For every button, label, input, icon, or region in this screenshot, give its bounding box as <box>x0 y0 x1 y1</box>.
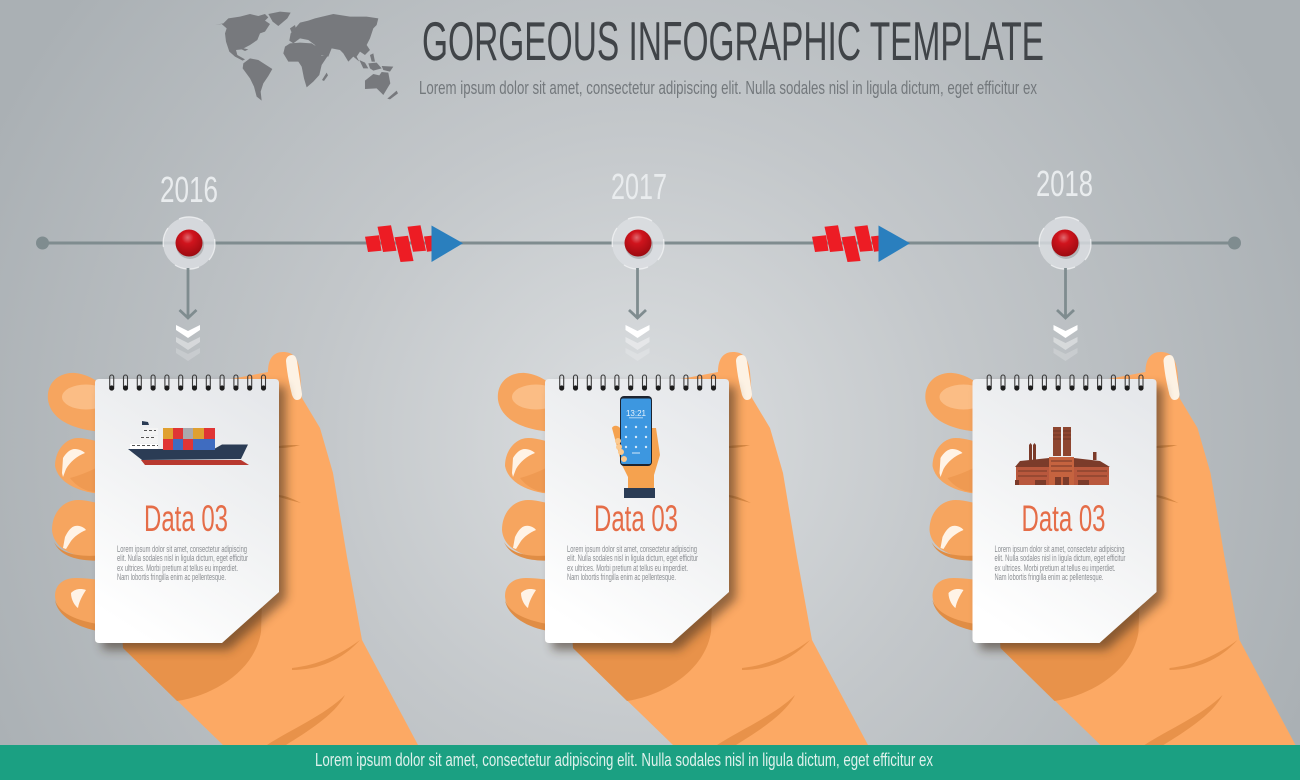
hand <box>925 352 1296 745</box>
card body text: ex ultrices. Morbi pretium at tellus eu imperdiet. <box>117 563 238 573</box>
notepad shadow <box>102 386 286 650</box>
notepad <box>95 379 279 643</box>
timeline axis <box>36 236 1241 250</box>
spiral binding <box>987 375 1144 391</box>
card body text: Nam lobortis fringilla enim ac pellentesque. <box>117 572 226 582</box>
down arrow 2018 <box>1054 268 1078 361</box>
arrow between 2016 and 2017 <box>365 225 463 262</box>
card body text: elit. Nulla sodales nisl in ligula dictum, eget efficitur <box>994 553 1126 563</box>
timeline marker 2018 <box>1039 217 1091 269</box>
card body text: Lorem ipsum dolor sit amet, consectetur adipiscing <box>994 544 1124 554</box>
arrow between 2017 and 2018 <box>812 225 910 262</box>
panel: 2016 hand with notepad <box>48 352 418 745</box>
card body text: Lorem ipsum dolor sit amet, consectetur adipiscing <box>117 544 247 554</box>
notepad <box>972 379 1156 643</box>
card body text: Nam lobortis fringilla enim ac pellentesque. <box>567 572 676 582</box>
card heading: Data 03 <box>144 498 228 539</box>
down arrow 2017 <box>626 268 650 361</box>
card heading: Data 03 <box>594 498 678 539</box>
icon: factory <box>1015 427 1110 485</box>
panel: 2018 hand with notepad <box>925 352 1296 745</box>
icon: container ship <box>128 421 249 465</box>
timeline marker 2017 <box>612 217 664 269</box>
card body text <box>117 544 248 582</box>
card body text: ex ultrices. Morbi pretium at tellus eu imperdiet. <box>567 563 688 573</box>
notepad <box>545 379 729 643</box>
hand <box>498 352 868 745</box>
year 2017: 2017 <box>611 166 667 207</box>
icon: hand holding smartphone: 13:21 <box>626 409 647 418</box>
year 2016: 2016 <box>160 169 218 210</box>
spiral binding <box>109 375 266 391</box>
footer band <box>0 745 1300 780</box>
spiral binding <box>559 375 716 391</box>
subtitle: Lorem ipsum dolor sit amet, consectetur adipiscing elit. Nulla sodales nisl in ligula dictum, eget efficitur ex <box>419 78 1037 98</box>
timeline marker 2016 <box>163 217 215 269</box>
card body text <box>994 544 1126 582</box>
hand <box>48 352 418 745</box>
card body text: elit. Nulla sodales nisl in ligula dictum, eget efficitur <box>117 553 248 563</box>
notepad shadow <box>552 386 736 650</box>
card heading: Data 03 <box>1022 498 1106 539</box>
card body text <box>567 544 698 582</box>
card body text: Lorem ipsum dolor sit amet, consectetur adipiscing <box>567 544 697 554</box>
footer text: Lorem ipsum dolor sit amet, consectetur adipiscing elit. Nulla sodales nisl in ligula dictum, eget efficitur ex <box>315 750 933 770</box>
card body text: elit. Nulla sodales nisl in ligula dictum, eget efficitur <box>567 553 698 563</box>
down arrow 2016 <box>176 268 200 361</box>
icon: hand holding smartphone <box>612 396 660 498</box>
card body text: Nam lobortis fringilla enim ac pellentesque. <box>994 572 1104 582</box>
panel: 2017 hand with notepad <box>498 352 868 745</box>
card body text: ex ultrices. Morbi pretium at tellus eu imperdiet. <box>994 563 1116 573</box>
notepad shadow <box>980 386 1164 650</box>
world map <box>215 12 398 101</box>
year 2018: 2018 <box>1036 163 1093 204</box>
